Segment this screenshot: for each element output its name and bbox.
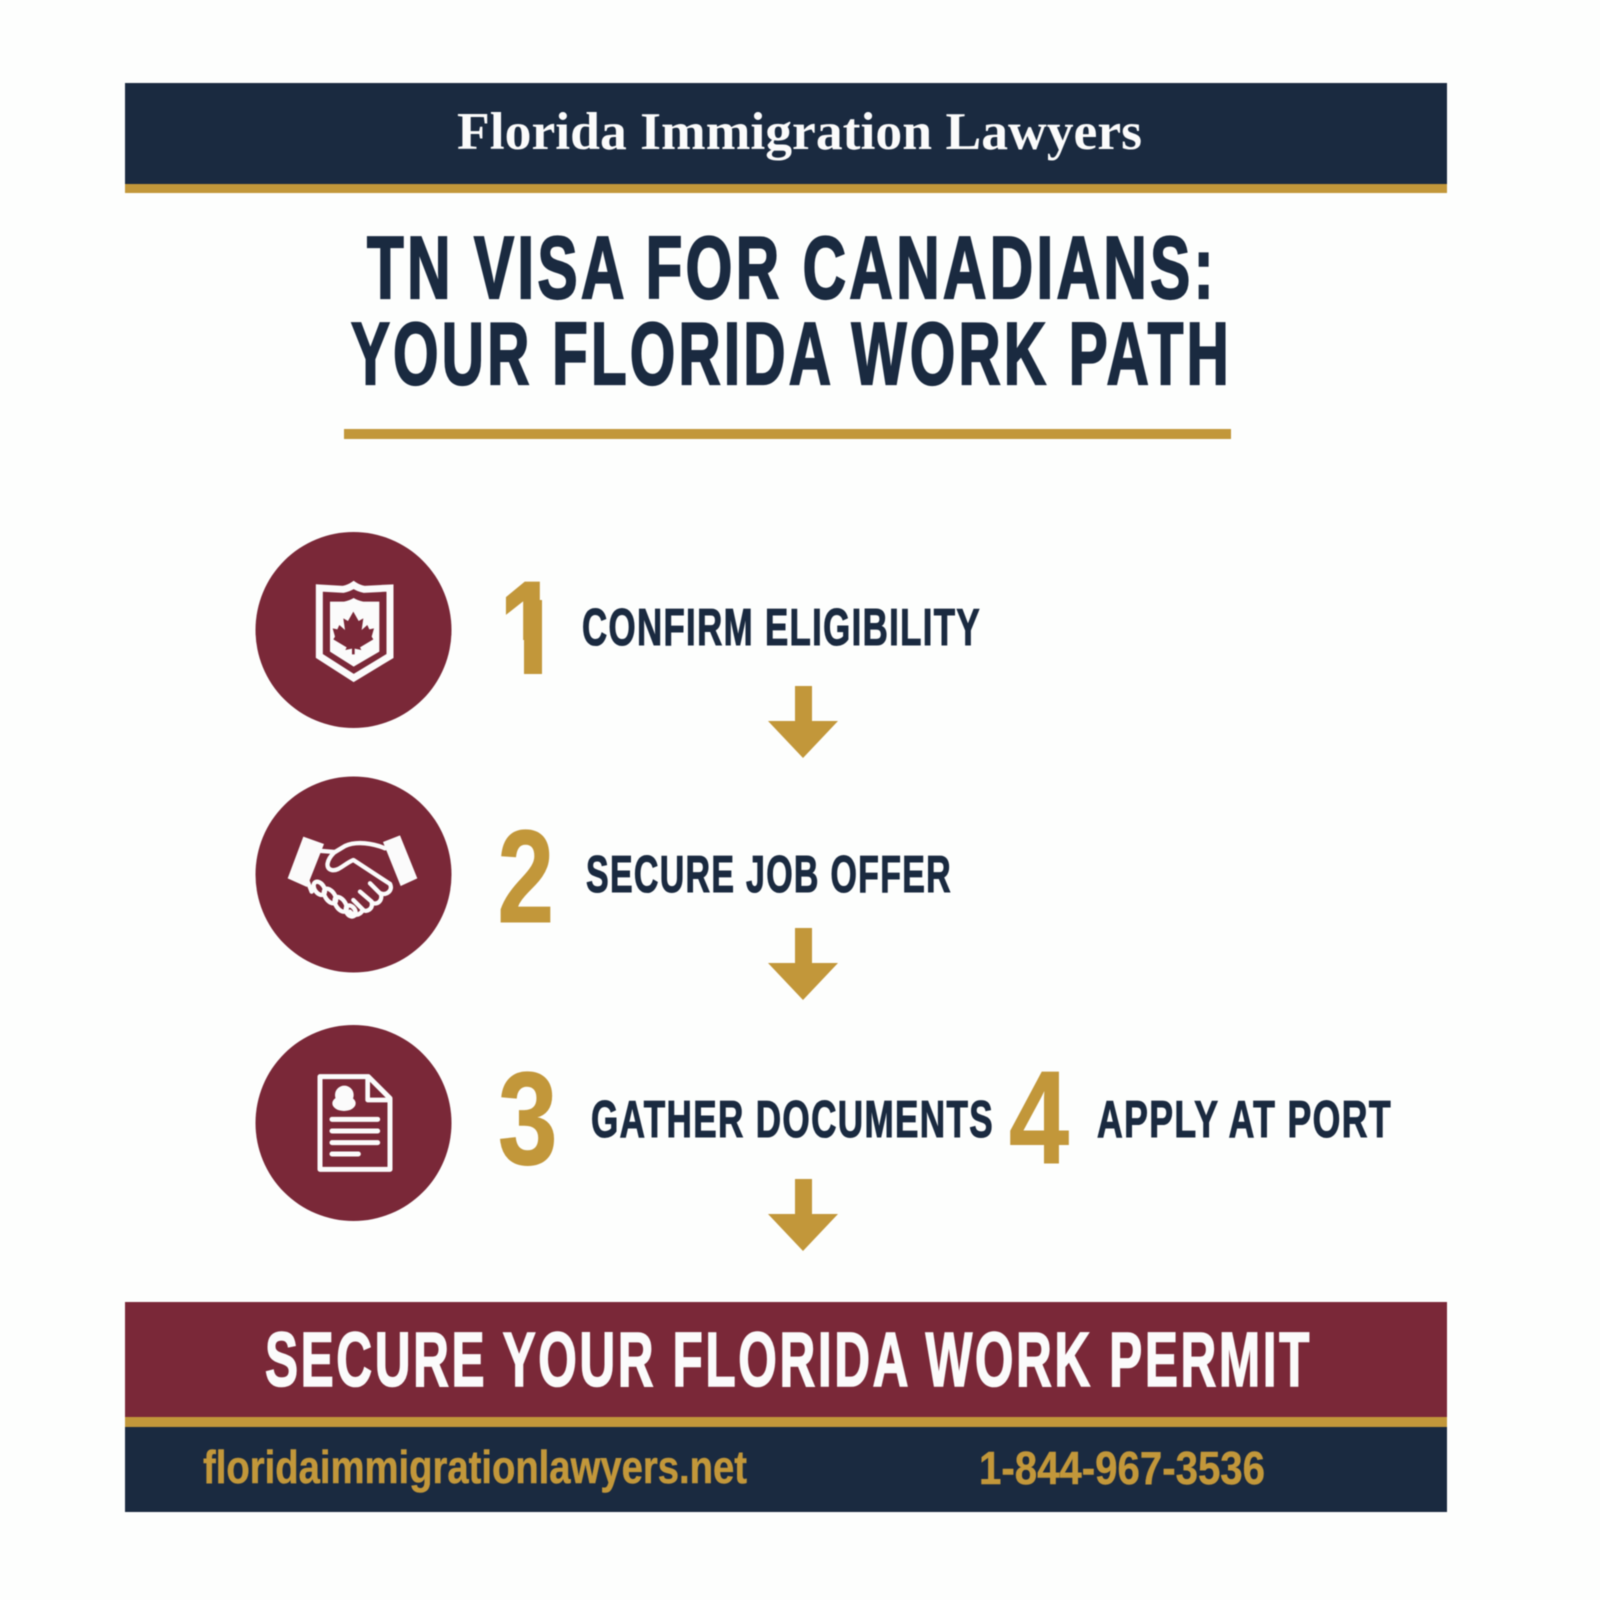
step label 3: GATHER DOCUMENTS bbox=[591, 1091, 994, 1149]
gold divider bbox=[125, 1417, 1447, 1427]
arrow 3 bbox=[768, 1179, 838, 1251]
step number 1: 1 bbox=[500, 555, 558, 702]
arrow 2 bbox=[768, 928, 838, 1000]
step label 2: SECURE JOB OFFER bbox=[586, 846, 952, 904]
step 3 bbox=[256, 1025, 994, 1221]
step 1 bbox=[256, 532, 981, 728]
icon: maple leaf bbox=[333, 612, 374, 654]
firm name: Florida Immigration Lawyers bbox=[457, 103, 1142, 161]
step 2 bbox=[256, 776, 952, 972]
call to action band bbox=[125, 1302, 1447, 1417]
step 4 bbox=[1009, 1044, 1392, 1191]
step number 3: 3 bbox=[498, 1045, 558, 1192]
step number 1 bbox=[505, 580, 543, 675]
step label 1: CONFIRM ELIGIBILITY bbox=[582, 599, 981, 657]
title rule bbox=[344, 429, 1231, 439]
icon: document with portrait bbox=[256, 1025, 452, 1221]
step number 4: 4 bbox=[1009, 1044, 1069, 1191]
contact band bbox=[125, 1427, 1447, 1512]
icon: handshake bbox=[256, 776, 452, 972]
website: floridaimmigrationlawyers.net bbox=[203, 1441, 747, 1493]
phone: 1-844-967-3536 bbox=[979, 1442, 1265, 1494]
main title bbox=[351, 218, 1232, 403]
arrow 1 bbox=[768, 686, 838, 758]
icon: shield with maple leaf bbox=[256, 532, 452, 728]
header band bbox=[125, 83, 1447, 193]
step label 4: APPLY AT PORT bbox=[1097, 1091, 1392, 1149]
step number 2: 2 bbox=[498, 803, 554, 950]
main title: TN VISA FOR CANADIANS: bbox=[367, 218, 1217, 317]
